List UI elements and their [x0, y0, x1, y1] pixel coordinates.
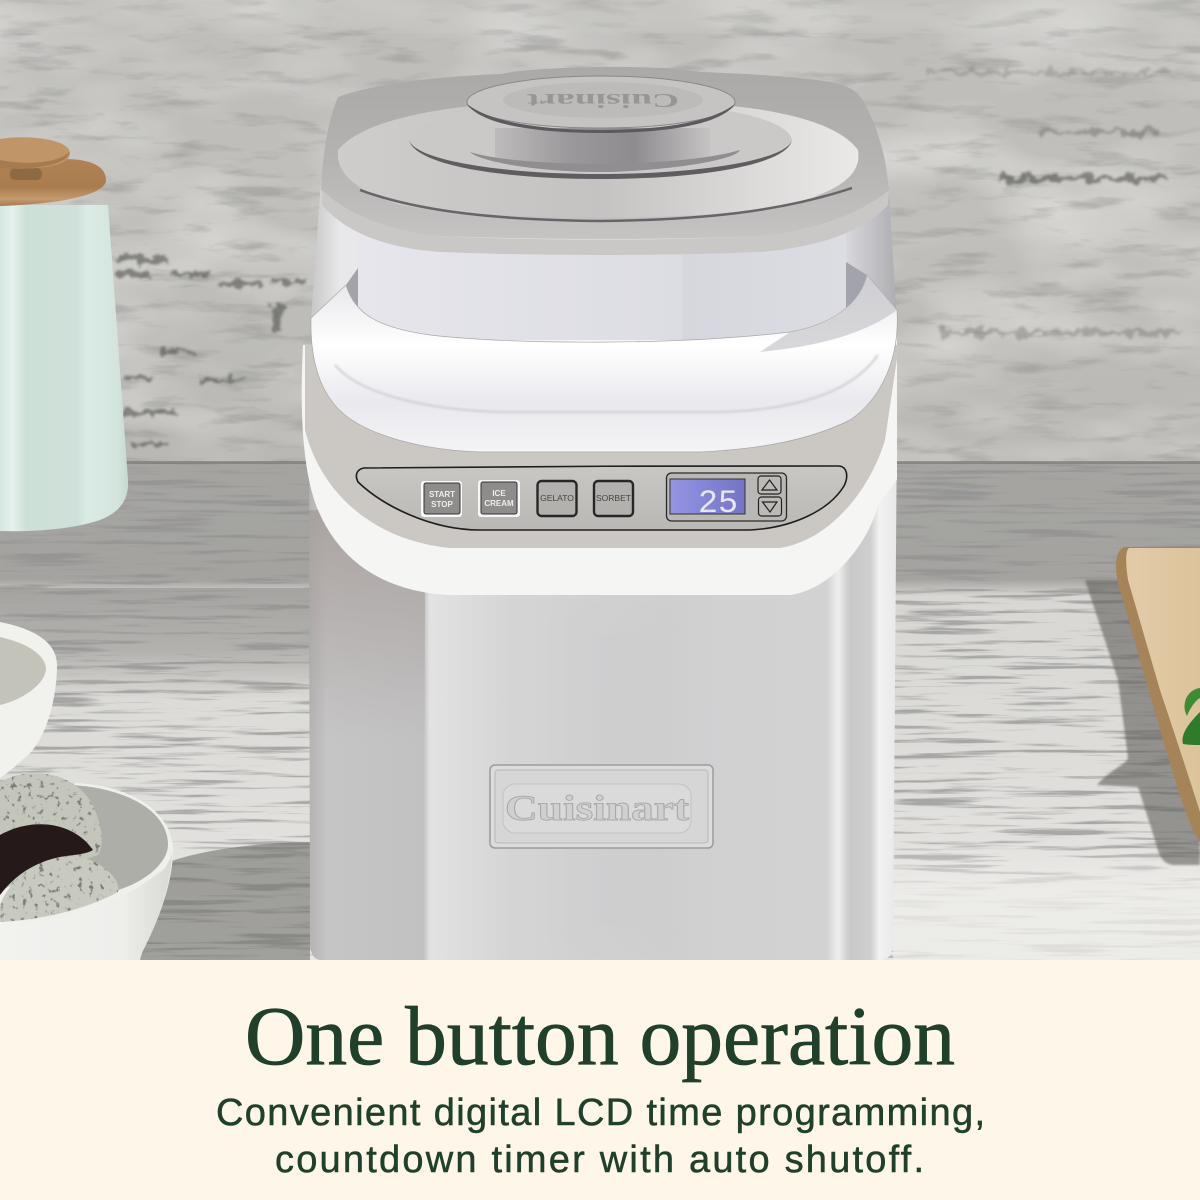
- cutting board with mint: [1085, 547, 1200, 865]
- description text: Convenient digital LCD time programming,: [216, 1092, 985, 1134]
- sorbet button: [594, 481, 633, 516]
- white collar band: [302, 330, 897, 595]
- start stop button: [421, 481, 462, 517]
- start stop button: START: [429, 490, 455, 499]
- gelato button: [538, 481, 576, 516]
- gelato button: GELATO: [540, 493, 574, 503]
- cookie: [0, 824, 93, 895]
- background: marble wall: [0, 0, 1200, 464]
- sorbet button: SORBET: [596, 493, 631, 503]
- cast shadow beside the machine: [140, 842, 310, 960]
- canister with wooden lid: [0, 137, 128, 531]
- ice cream button: ICE: [492, 489, 506, 498]
- ice cream button: CREAM: [484, 499, 514, 508]
- heading: One button operation: [245, 990, 955, 1083]
- square transparent lid: [321, 67, 889, 255]
- upper bowl: [0, 622, 57, 778]
- shadow gap behind bowl: [346, 262, 867, 332]
- beige collar surface: [305, 345, 899, 548]
- LCD display: [666, 473, 786, 522]
- background: marble countertop: [0, 461, 1200, 960]
- down arrow button: [758, 497, 782, 516]
- lid cap: [467, 76, 735, 133]
- mint leaf: [1182, 688, 1200, 745]
- LCD display: 25: [698, 485, 738, 522]
- white collar rim: [311, 275, 897, 452]
- ice cream button: [478, 480, 520, 517]
- lid cap: Cuisinart: [526, 89, 679, 111]
- description text: [216, 1092, 985, 1181]
- clear lid skirt: [311, 180, 897, 320]
- control panel: [356, 466, 847, 530]
- start stop button: STOP: [431, 500, 453, 509]
- wooden lid: [0, 137, 106, 206]
- stainless steel body: [309, 420, 897, 960]
- caption panel: [0, 960, 1200, 1200]
- board shadow: [1085, 580, 1200, 865]
- Cuisinart logo plate: [490, 765, 713, 848]
- canister body: [0, 205, 128, 531]
- lower bowl: [0, 773, 173, 960]
- bowls of cookies and cream ice cream: [0, 622, 173, 960]
- Cuisinart logo plate: Cuisinart: [505, 788, 689, 828]
- ice cream maker: [302, 67, 899, 960]
- ice cream scoops: [0, 773, 102, 890]
- lid opening ring: [409, 102, 792, 179]
- description text: countdown timer with auto shutoff.: [275, 1139, 924, 1181]
- up arrow button: [758, 476, 781, 494]
- freezer bowl: [357, 230, 848, 340]
